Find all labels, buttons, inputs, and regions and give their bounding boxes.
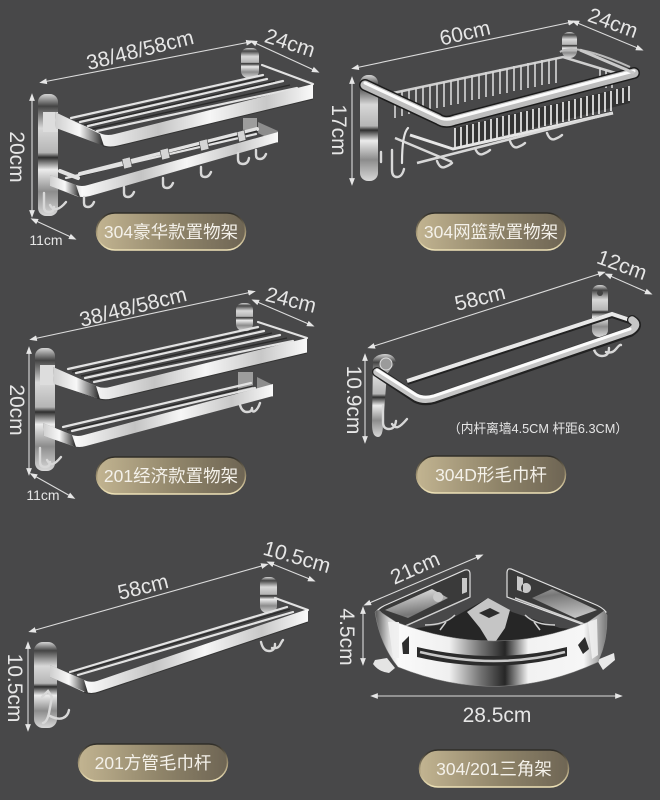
label pill: [420, 750, 568, 787]
label pill: 201方管毛巾杆: [95, 753, 211, 773]
dimension: width: 60cm: [438, 17, 493, 50]
note: bar spacing: （内杆离墙4.5CM 杆距6.3CM）: [448, 421, 628, 436]
dimension: height: [327, 80, 352, 182]
label pill: 304网篮款置物架: [424, 222, 558, 242]
dimension: depth: 12cm: [594, 246, 650, 285]
dimension: width: [32, 565, 265, 631]
label pill: [96, 213, 246, 250]
label pill: 304豪华款置物架: [104, 222, 238, 242]
dimension: height: 10.5cm: [3, 654, 26, 722]
label pill: [416, 213, 566, 250]
dimension: depth: 24cm: [262, 25, 318, 62]
dimension: depth: 24cm: [263, 283, 319, 318]
label pill: [78, 744, 228, 781]
dimension: width: [43, 26, 250, 82]
right foot: [597, 653, 615, 670]
label pill: 201经济款置物架: [104, 466, 238, 486]
dimension: width: [371, 273, 602, 347]
dimension: 21cm: 21cm: [387, 548, 443, 589]
dimension: height: 17cm: [327, 104, 350, 156]
product: corner shelf: [373, 569, 615, 686]
product: basket rack: [360, 32, 634, 181]
dimension: 21cm: [367, 548, 480, 604]
dimension: 11cm: [29, 220, 73, 248]
right wall plate: [507, 569, 606, 626]
left foot: [373, 658, 395, 673]
dimension: width: 58cm: [452, 281, 508, 316]
dimension: width: [355, 17, 572, 68]
product: deluxe rack with hooks: [38, 48, 313, 216]
product: economy rack: [35, 303, 307, 471]
dimension: 11cm: 11cm: [26, 487, 60, 503]
panel: 304 D-shaped towel bar: [342, 246, 650, 493]
panel: 304 basket rack: [327, 4, 641, 250]
dimension: height: 4.5cm: [335, 608, 358, 666]
product: square tube towel bar: [34, 577, 308, 728]
dimension: width: 58cm: [115, 570, 171, 605]
dimension: height: [5, 97, 32, 214]
left wall plate: [376, 570, 470, 627]
dimension: height: 10.9cm: [342, 366, 365, 434]
dimension: width: [33, 283, 252, 339]
dimension: height: [5, 350, 29, 472]
dimension: width: 38/48/58cm: [84, 26, 196, 75]
label pill: [96, 457, 246, 494]
label pill: 304D形毛巾杆: [435, 465, 547, 485]
label pill: [416, 456, 566, 493]
dimension: height: 20cm: [5, 131, 28, 183]
panel: 304/201 corner shelf: [335, 548, 619, 787]
front arc band: [375, 610, 607, 686]
dimension: 11cm: [26, 475, 72, 503]
dimension: width: 38/48/58cm: [77, 283, 189, 332]
dimension: depth: 10.5cm: [261, 537, 333, 578]
dimension: height: 20cm: [5, 384, 28, 436]
dimension: 28.5cm: 28.5cm: [463, 704, 531, 727]
label pill: 304/201三角架: [436, 759, 552, 779]
product: D-shaped towel bar: [372, 285, 636, 437]
dimension: 11cm: 11cm: [29, 232, 63, 248]
panel: 201 economy rack: [5, 283, 319, 503]
panel: 304 deluxe rack: [5, 25, 318, 250]
dimension: depth: 24cm: [585, 4, 641, 43]
panel: 201 square tube towel bar: [3, 537, 333, 781]
